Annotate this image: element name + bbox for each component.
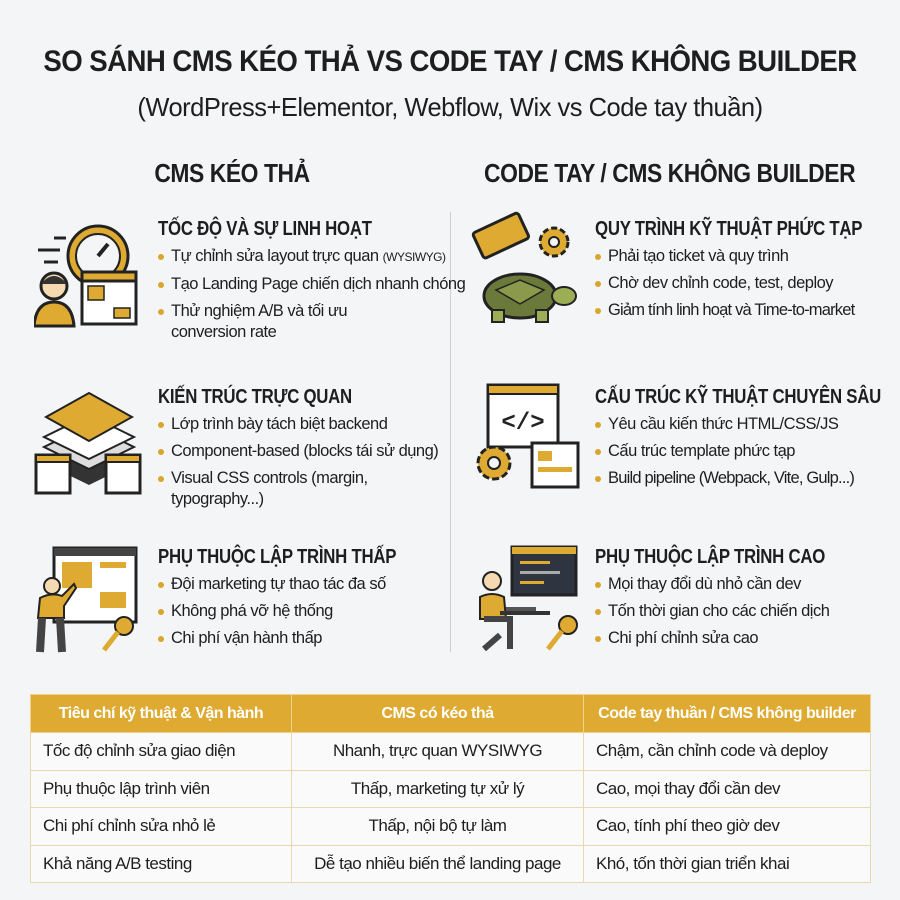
section: speed & flexibility — [158, 216, 465, 341]
icon: person at board with keys — [36, 546, 138, 652]
section: deep technical structure: CẤU TRÚC KỸ THUẬT CHUYÊN SÂU — [595, 386, 881, 408]
section: speed & flexibility: conversion rate — [171, 323, 276, 341]
title: SO SÁNH CMS KÉO THẢ VS CODE TAY / CMS KHÔNG BUILDER — [43, 45, 857, 78]
comparison table: Khó, tốn thời gian triển khai — [596, 854, 789, 873]
comparison table: CMS có kéo thả — [381, 704, 494, 722]
section: complex technical process: QUY TRÌNH KỸ THUẬT PHỨC TẠP — [595, 218, 862, 240]
section: high programming dependency: Mọi thay đổi dù nhỏ cần dev — [608, 575, 801, 593]
comparison table: Tốc độ chỉnh sửa giao diện — [43, 741, 235, 760]
section: speed & flexibility: TỐC ĐỘ VÀ SỰ LINH HOẠT — [158, 218, 372, 240]
section: high programming dependency: Chi phí chỉnh sửa cao — [608, 629, 758, 647]
comparison table: Khả năng A/B testing — [43, 854, 192, 873]
section: visual architecture — [158, 384, 438, 508]
section: low programming dependency: PHỤ THUỘC LẬP TRÌNH THẤP — [158, 546, 396, 568]
section: high programming dependency — [595, 544, 829, 647]
section: deep technical structure — [595, 384, 881, 487]
section: high programming dependency: Tốn thời gian cho các chiến dịch — [608, 602, 829, 620]
section: high programming dependency: PHỤ THUỘC LẬP TRÌNH CAO — [595, 546, 825, 568]
section: low programming dependency — [158, 544, 396, 647]
icon: code window and gears — [476, 384, 580, 488]
icon: code window and gears: </> — [501, 410, 545, 437]
comparison table: Nhanh, trực quan WYSIWYG — [333, 741, 542, 760]
section: speed & flexibility: Tạo Landing Page chiến dịch nhanh chóng — [171, 275, 465, 293]
comparison table — [30, 694, 871, 883]
section: low programming dependency: Đội marketing tự thao tác đa số — [171, 575, 386, 593]
section: deep technical structure: Yêu cầu kiến thức HTML/CSS/JS — [608, 415, 838, 433]
subtitle: (WordPress+Elementor, Webflow, Wix vs Code tay thuần) — [137, 92, 763, 122]
section: low programming dependency: Không phá vỡ hệ thống — [171, 602, 333, 620]
comparison table: Chậm, cần chỉnh code và deploy — [596, 741, 828, 760]
comparison table: Dễ tạo nhiều biến thể landing page — [314, 854, 561, 873]
section: complex technical process — [595, 216, 862, 319]
section: speed & flexibility: Thử nghiệm A/B và tối ưu — [171, 302, 347, 320]
icon: developer at desk with keys — [479, 546, 578, 652]
comparison table: Cao, mọi thay đổi cần dev — [596, 779, 780, 798]
comparison table: Code tay thuần / CMS không builder — [598, 704, 856, 722]
comparison table: Thấp, nội bộ tự làm — [369, 816, 506, 835]
section: visual architecture: Component-based (blocks tái sử dụng) — [171, 442, 438, 460]
section: deep technical structure: Build pipeline (Webpack, Vite, Gulp...) — [608, 469, 854, 487]
comparison table: Thấp, marketing tự xử lý — [351, 779, 524, 798]
section: visual architecture: typography...) — [171, 490, 264, 508]
section: visual architecture: Lớp trình bày tách biệt backend — [171, 415, 387, 433]
section: complex technical process: Chờ dev chỉnh code, test, deploy — [608, 274, 833, 292]
section: speed & flexibility: Tự chỉnh sửa layout trực quan (WYSIWYG) — [171, 247, 446, 265]
comparison table: Cao, tính phí theo giờ dev — [596, 816, 779, 835]
section: complex technical process: Phải tạo ticket và quy trình — [608, 247, 788, 265]
comparison table: Chi phí chỉnh sửa nhỏ lẻ — [43, 816, 215, 835]
icon: layers — [34, 392, 142, 494]
section: visual architecture: KIẾN TRÚC TRỰC QUAN — [158, 386, 352, 408]
icon: ticket, gears and turtle — [472, 212, 577, 323]
section: deep technical structure: Cấu trúc template phức tạp — [608, 442, 795, 460]
heading: right column: CODE TAY / CMS KHÔNG BUILDER — [484, 158, 855, 188]
comparison table: Tiêu chí kỹ thuật & Vận hành — [59, 704, 263, 722]
heading: left column: CMS KÉO THẢ — [154, 158, 310, 188]
icon: stopwatch and user — [34, 224, 138, 328]
section: low programming dependency: Chi phí vận hành thấp — [171, 629, 322, 647]
section: complex technical process: Giảm tính linh hoạt và Time-to-market — [608, 301, 854, 319]
section: visual architecture: Visual CSS controls (margin, — [171, 469, 368, 487]
comparison table: Phụ thuộc lập trình viên — [43, 779, 210, 798]
